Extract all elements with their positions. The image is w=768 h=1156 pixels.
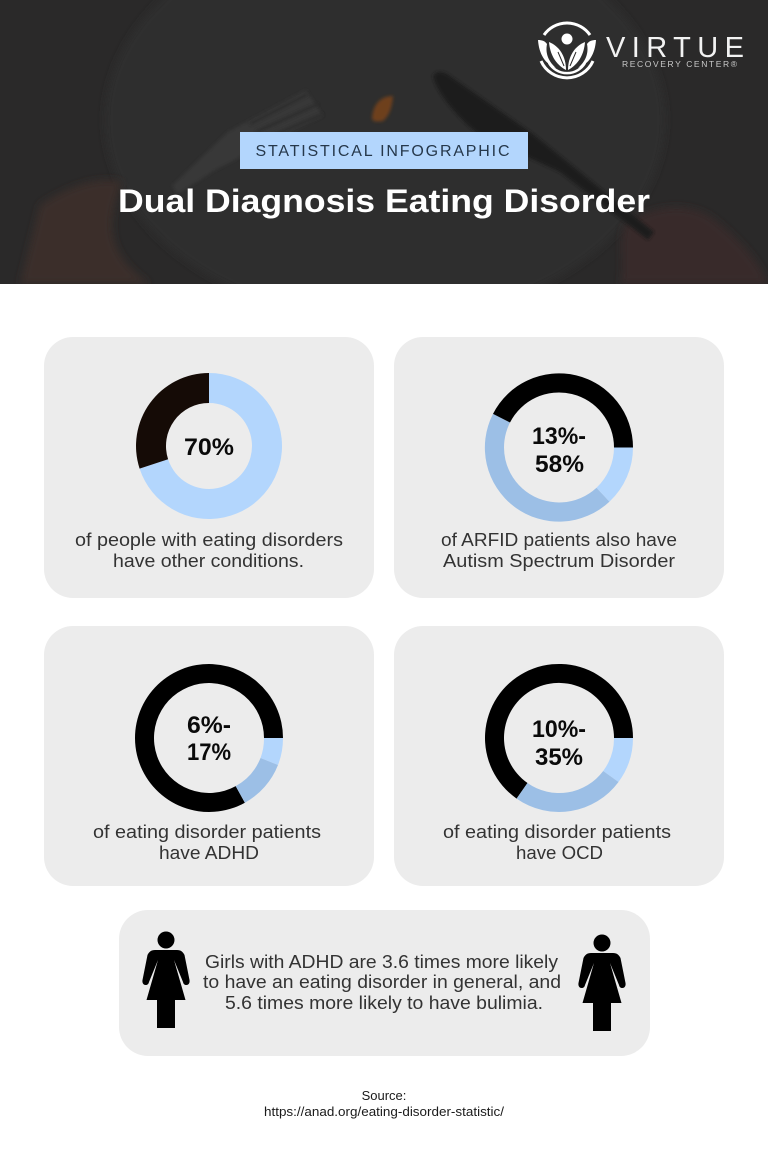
panel: 13 to 58 percent bbox=[394, 337, 724, 598]
stat value: 17% bbox=[187, 739, 231, 766]
logo tagline: RECOVERY CENTER® bbox=[622, 59, 738, 69]
caption: of ARFID patients also have bbox=[441, 530, 677, 550]
panel: girls with ADHD bbox=[119, 910, 650, 1056]
caption: have other conditions. bbox=[113, 551, 304, 571]
icon: woman right bbox=[578, 934, 626, 1031]
caption: of people with eating disorders bbox=[75, 530, 343, 550]
caption: have ADHD bbox=[159, 843, 259, 863]
logo wordmark: VIRTUE bbox=[606, 32, 744, 64]
logo: Virtue Recovery Center bbox=[538, 23, 744, 78]
stat value: 70% bbox=[184, 434, 234, 461]
donut chart: 6 to 17 percent bbox=[135, 664, 283, 812]
stat value: 58% bbox=[535, 451, 584, 478]
header banner with blurred plate photo bbox=[0, 0, 768, 284]
callout text: Girls with ADHD are 3.6 times more likely bbox=[205, 952, 558, 972]
callout text: to have an eating disorder in general, and bbox=[203, 972, 561, 992]
source: Source: bbox=[362, 1088, 406, 1103]
donut chart: 10 to 35 percent bbox=[485, 664, 633, 812]
stat value: 13%- bbox=[532, 423, 586, 450]
panel: 10 to 35 percent bbox=[394, 626, 724, 886]
caption: have OCD bbox=[516, 843, 603, 863]
caption: Autism Spectrum Disorder bbox=[443, 551, 675, 571]
source bbox=[264, 1088, 504, 1119]
icon: lotus in ring bbox=[538, 23, 596, 78]
stat value: 6%- bbox=[187, 712, 231, 739]
badge: statistical infographic bbox=[240, 132, 528, 169]
icon: woman left bbox=[142, 932, 190, 1028]
panel: 70 percent bbox=[44, 337, 374, 598]
panel: 6 to 17 percent bbox=[44, 626, 374, 886]
callout text: 5.6 times more likely to have bulimia. bbox=[225, 993, 543, 1013]
source: https://anad.org/eating-disorder-statistic/ bbox=[264, 1104, 504, 1119]
stat value: 10%- bbox=[532, 716, 586, 743]
donut chart: 13 to 58 percent bbox=[485, 373, 633, 522]
stat value: 35% bbox=[535, 744, 583, 771]
badge: statistical infographic: STATISTICAL INFOGRAPHIC bbox=[256, 143, 510, 160]
donut chart: 70 percent bbox=[136, 373, 282, 519]
title: Dual Diagnosis Eating Disorder bbox=[118, 183, 650, 219]
caption: of eating disorder patients bbox=[443, 822, 671, 842]
caption: of eating disorder patients bbox=[93, 822, 321, 842]
